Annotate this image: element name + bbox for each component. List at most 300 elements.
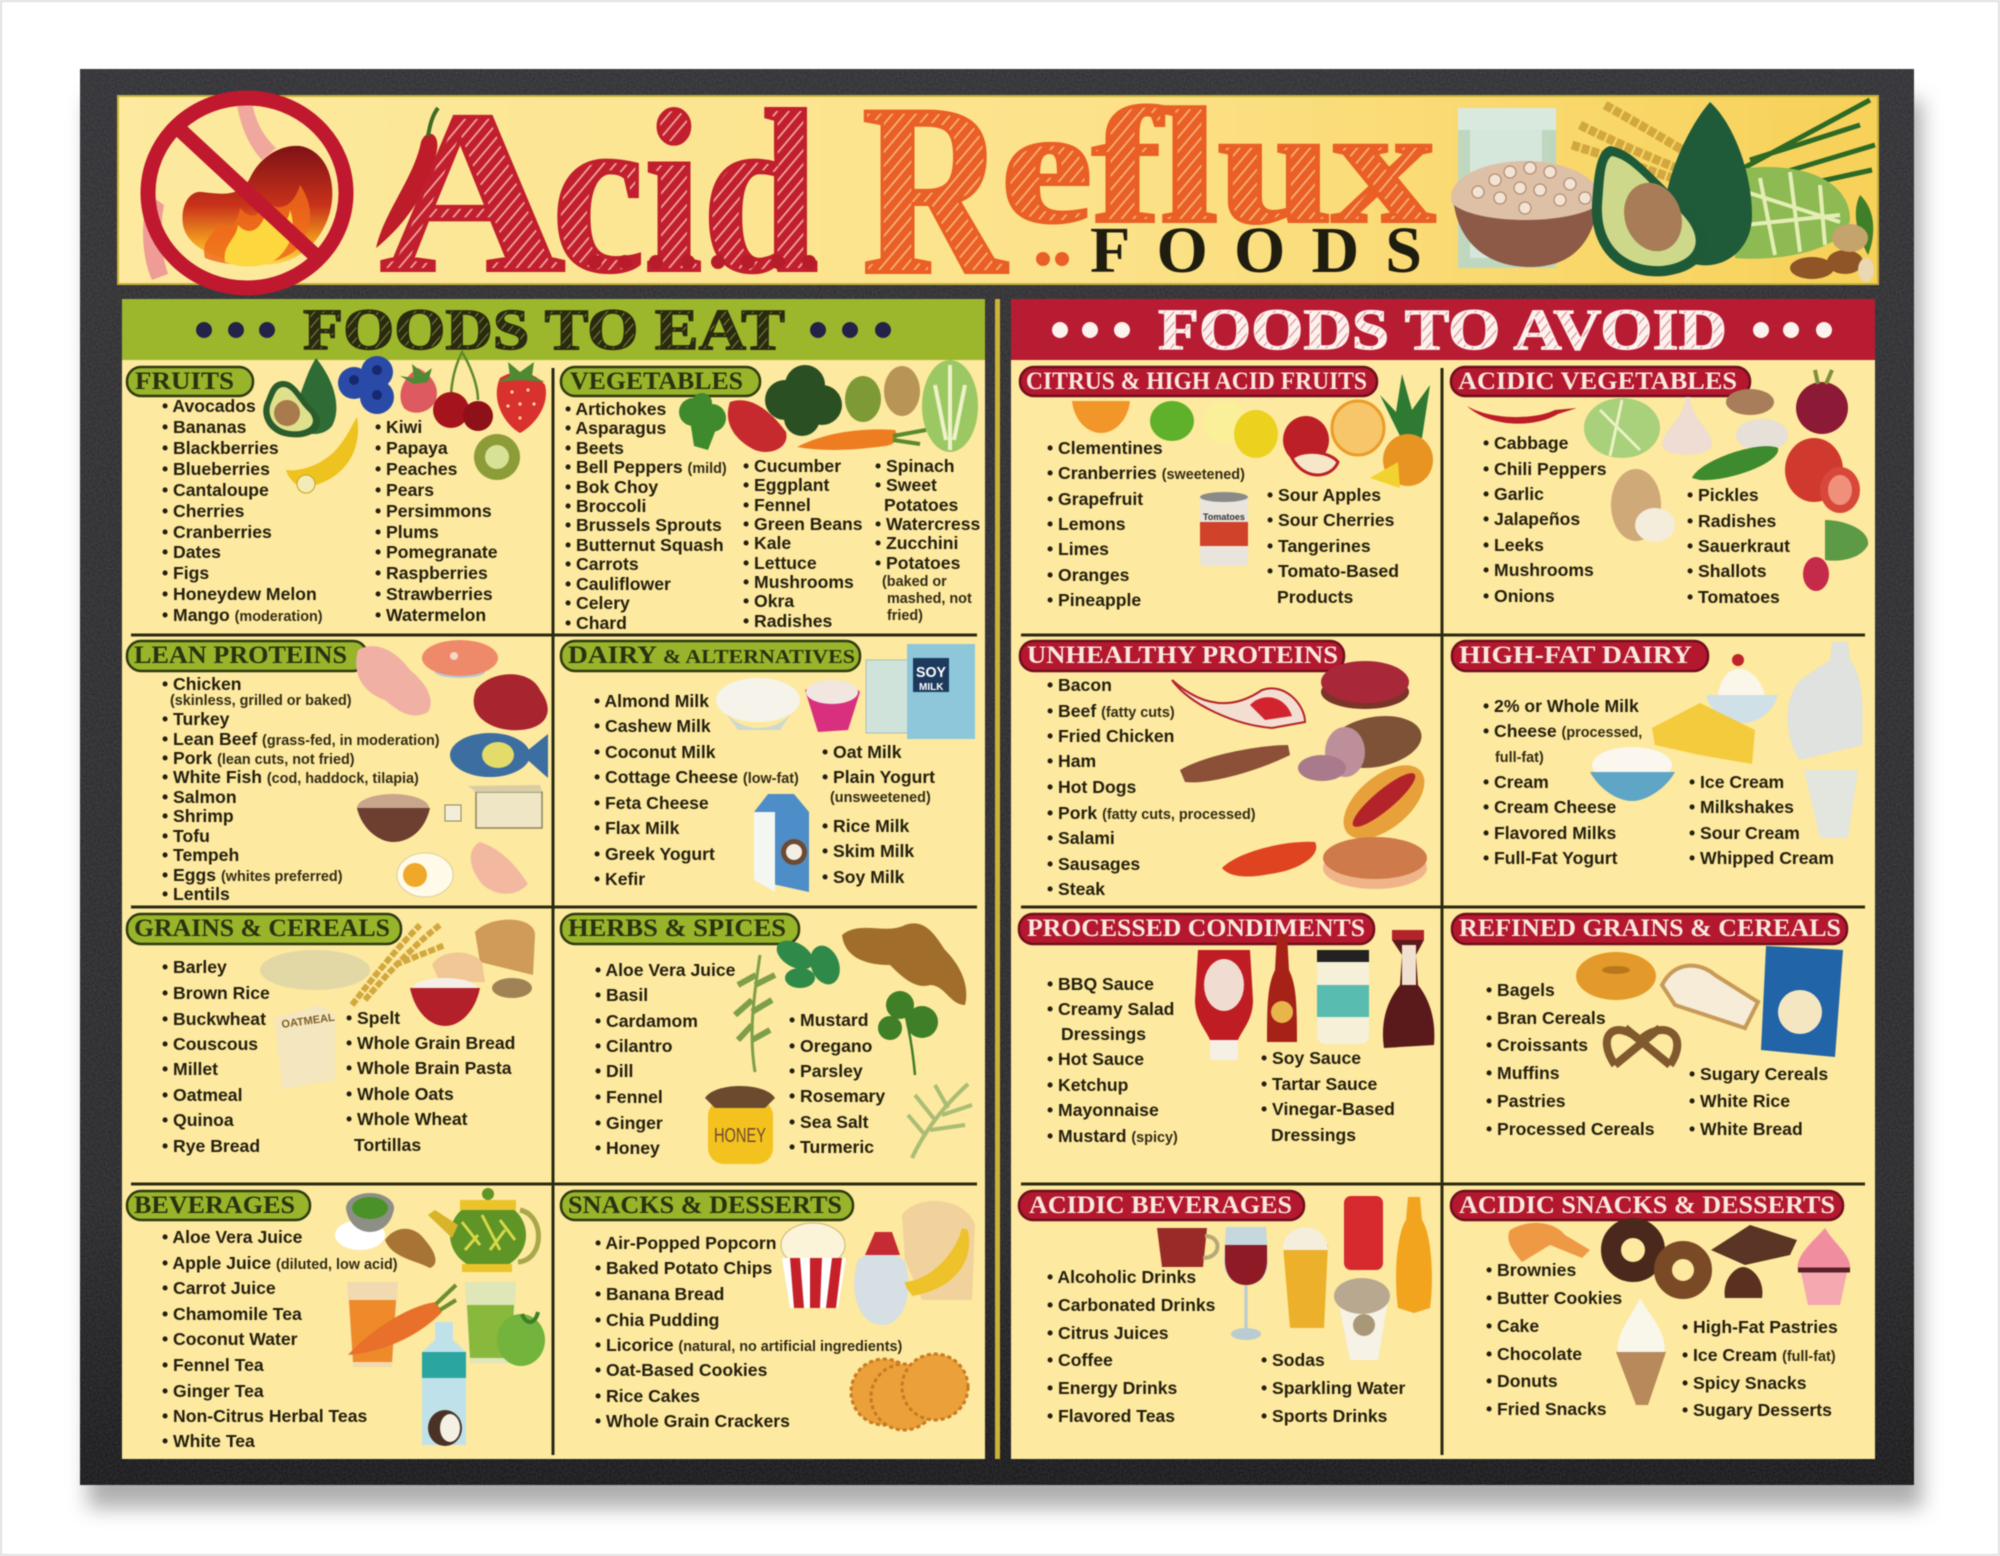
list: acidic vegetables column 1: • Jalapeños (1483, 509, 1580, 529)
list: lean proteins: • Turkey (162, 709, 230, 729)
icon: lemon slice (1203, 401, 1247, 443)
list: vegetables column 2: • Green Beans (743, 514, 863, 534)
list: acidic beverages column 1: • Energy Drinks (1047, 1378, 1178, 1398)
list: acidic beverages column 1: • Citrus Juices (1047, 1323, 1169, 1343)
icon: carrot juice glass (347, 1282, 398, 1367)
list: high-fat dairy column 1: • Full-Fat Yogurt (1483, 848, 1618, 868)
list: fruits column 1: • Figs (162, 563, 209, 583)
list: acidic beverages column 1: • Alcoholic Drinks (1047, 1267, 1196, 1287)
list: vegetables column 1: • Asparagus (565, 418, 667, 438)
list: grains column 1: • Buckwheat (162, 1009, 266, 1029)
icon: soy milk carton: MILK (919, 682, 944, 693)
list: citrus column 1: • Grapefruit (1047, 489, 1143, 509)
icon: onion (1611, 469, 1675, 542)
list: vegetables column 3: • Watercress (875, 514, 980, 534)
list: condiments column 2: • Tartar Sauce (1261, 1074, 1378, 1094)
label: lean proteins: LEAN PROTEINS (134, 642, 347, 669)
icon: steak (1321, 661, 1409, 709)
list: unhealthy proteins: • Beef (fatty cuts) (1047, 701, 1175, 721)
list: unhealthy proteins: • Sausages (1047, 854, 1140, 874)
list: high-fat dairy column 1: full-fat) (1495, 750, 1544, 766)
icon: tomato can (1200, 492, 1248, 566)
list: grains column 2: • Whole Grain Bread (346, 1033, 515, 1053)
list: beverages: • Fennel Tea (162, 1355, 264, 1375)
list: dairy column 2: • Rice Milk (822, 816, 910, 836)
list: refined column 1: • Pastries (1486, 1091, 1566, 1111)
list: grains column 1: • Oatmeal (162, 1085, 242, 1105)
title word: Acid: A (380, 64, 565, 321)
icon: napa cabbage (922, 360, 978, 452)
icon: ham (1298, 709, 1426, 781)
list: refined column 2: • White Rice (1689, 1091, 1790, 1111)
list: herbs column 1: • Honey (595, 1138, 660, 1158)
icon: blueberries (338, 356, 394, 414)
list: dairy column 2: • Skim Milk (822, 841, 914, 861)
list: grains column 2: • Whole Oats (346, 1084, 454, 1104)
list: refined column 1: • Processed Cereals (1486, 1119, 1655, 1139)
icon: egg (397, 853, 453, 897)
list: lean proteins: • Shrimp (162, 806, 234, 826)
list: fruits column 2: • Strawberries (375, 584, 493, 604)
section: lean proteins (127, 640, 548, 904)
icon: salami (1180, 745, 1290, 782)
list: dairy column 1: • Kefir (594, 869, 645, 889)
list: vegetables column 1: • Celery (565, 593, 630, 613)
list: grains column 1: • Rye Bread (162, 1136, 260, 1156)
list: vegetables column 2: • Okra (743, 591, 794, 611)
icon: fried chicken (1508, 1223, 1590, 1262)
list: beverages: • White Tea (162, 1431, 255, 1451)
icon: sausage (1222, 842, 1316, 876)
list: vegetables column 2: • Mushrooms (743, 572, 854, 592)
list: grains column 1: • Quinoa (162, 1110, 234, 1130)
list: unhealthy proteins: • Ham (1047, 751, 1096, 771)
list: citrus column 1: • Oranges (1047, 565, 1130, 585)
list: citrus column 1: • Cranberries (sweetened) (1047, 463, 1245, 483)
list: vegetables column 3: Potatoes (884, 495, 959, 515)
list: fruits column 1: • Blackberries (162, 438, 279, 458)
title word: Reflux: eflux (1001, 76, 1435, 257)
list: dairy column 2: (unsweetened) (830, 790, 931, 806)
icon: rice bowl (410, 978, 480, 1026)
icon: brussels sprout (845, 376, 881, 422)
list: acidic vegetables column 1: • Onions (1483, 586, 1555, 606)
icon: wheat stalks (352, 925, 445, 1005)
icon: hot dog (1331, 751, 1437, 853)
list: herbs column 1: • Fennel (595, 1087, 663, 1107)
icon: dark leafy broccoli (765, 365, 842, 436)
section: grains and cereals (127, 914, 535, 1156)
list: lean proteins: • Salmon (162, 787, 237, 807)
icon: thyme sprig (735, 955, 775, 1072)
icon: soy milk carton (907, 644, 975, 739)
label: acidic snacks: ACIDIC SNACKS & DESSERTS (1459, 1192, 1835, 1219)
list: fruits column 2: • Watermelon (375, 605, 486, 625)
list: acidic vegetables column 2: • Sauerkraut (1687, 536, 1790, 556)
list: unhealthy proteins: • Salami (1047, 828, 1115, 848)
list: fruits column 2: • Raspberries (375, 563, 488, 583)
list: acidic vegetables column 1: • Cabbage (1483, 433, 1569, 453)
list: dairy column 1: • Feta Cheese (594, 793, 709, 813)
list: unhealthy proteins: • Pork (fatty cuts, processed) (1047, 803, 1256, 823)
icon: honey jar: HONEY (714, 1125, 766, 1147)
heading banner: foods to eat: FOODS TO EAT (303, 297, 785, 362)
list: fruits column 2: • Plums (375, 522, 439, 542)
list: acidic beverages column 1: • Flavored Teas (1047, 1406, 1175, 1426)
list: grains column 1: • Brown Rice (162, 983, 270, 1003)
list: citrus column 2: • Tangerines (1267, 536, 1371, 556)
list: lean proteins: • Eggs (whites preferred) (162, 865, 343, 885)
section: acidic beverages (1019, 1191, 1432, 1426)
list: fruits column 1: • Dates (162, 542, 221, 562)
icon: yogurt cup (805, 680, 860, 732)
icon: broccoli (679, 393, 726, 450)
list: vegetables column 1: • Broccoli (565, 496, 646, 516)
list: acidic snacks column 1: • Brownies (1486, 1260, 1576, 1280)
icon: no-heartburn stomach (143, 98, 346, 288)
list: unhealthy proteins: • Steak (1047, 879, 1105, 899)
icon: shrimp (471, 842, 528, 894)
list: herbs column 2: • Oregano (789, 1036, 873, 1056)
list: lean proteins: • Tofu (162, 826, 210, 846)
icon: dill (908, 1084, 972, 1158)
dots before FOODS (1036, 252, 1069, 266)
icon: raspberry (400, 364, 437, 413)
icon: carrot (797, 429, 926, 450)
icon: popcorn (781, 1223, 846, 1308)
list: vegetables column 2: • Fennel (743, 495, 811, 515)
icon: strawberry (497, 362, 546, 433)
section: citrus and high acid fruits (1020, 367, 1433, 610)
list: vegetables column 1: • Bell Peppers (mild) (565, 457, 727, 477)
list: herbs column 2: • Mustard (789, 1010, 868, 1030)
icon: nuts (1790, 224, 1874, 282)
list: herbs column 1: • Cilantro (595, 1036, 673, 1056)
list: snacks: • Whole Grain Crackers (595, 1411, 790, 1431)
label: fruits: FRUITS (135, 368, 234, 395)
icon: ginger (385, 1229, 435, 1268)
list: acidic vegetables column 2: • Radishes (1687, 511, 1776, 531)
icon: tofu block (445, 785, 542, 828)
list: refined column 2: • White Bread (1689, 1119, 1803, 1139)
list: vegetables column 2: • Eggplant (743, 475, 829, 495)
icon: crackers (851, 1354, 968, 1430)
icon: banana bread (902, 1201, 975, 1300)
list: snacks: • Rice Cakes (595, 1386, 700, 1406)
list: grains column 2: • Whole Brain Pasta (346, 1058, 512, 1078)
icon: bagel (1576, 952, 1656, 1000)
icon: fish (450, 733, 548, 778)
label: fruits (127, 367, 253, 396)
list: beverages: • Carrot Juice (162, 1278, 276, 1298)
label: acidic beverages: ACIDIC BEVERAGES (1029, 1192, 1292, 1219)
section: snacks and desserts (561, 1191, 975, 1431)
list: herbs column 1: • Aloe Vera Juice (595, 960, 736, 980)
list: fruits column 2: • Kiwi (375, 417, 422, 437)
list: dairy column 2: • Oat Milk (822, 742, 902, 762)
list: grains column 2: • Whole Wheat (346, 1109, 468, 1129)
icon: hot sauce bottle (1267, 934, 1297, 1042)
list: vegetables column 3: mashed, not (887, 591, 972, 607)
icon: soy milk carton: SOY (916, 664, 946, 681)
title word: Acid: cid (552, 64, 818, 321)
icon: glass of milk (866, 660, 909, 733)
icon: cherries (433, 352, 493, 431)
icon: coconut (428, 1410, 462, 1446)
icon: soy sauce bottle (1383, 930, 1434, 1048)
list: condiments column 1: • Ketchup (1047, 1075, 1129, 1095)
list: snacks: • Baked Potato Chips (595, 1258, 772, 1278)
icon: burger patty (1323, 837, 1427, 889)
list: snacks: • Air-Popped Popcorn (595, 1233, 776, 1253)
heading banner: foods to avoid (1011, 297, 1875, 362)
list: condiments column 1: Dressings (1061, 1024, 1146, 1044)
icon: avocado (263, 358, 336, 437)
list: beverages: • Chamomile Tea (162, 1304, 302, 1324)
list: acidic snacks column 2: • Ice Cream (full-fat) (1682, 1345, 1836, 1365)
list: fruits column 1: • Bananas (162, 417, 247, 437)
list: dairy column 1: • Greek Yogurt (594, 844, 715, 864)
icon: orange soda bottle (1396, 1197, 1432, 1313)
icon: orange slice (1332, 401, 1384, 455)
list: acidic beverages column 2: • Sparkling Water (1261, 1378, 1405, 1398)
section: refined grains and cereals (1452, 914, 1847, 1139)
list: high-fat dairy column 1: • Flavored Milks (1483, 823, 1616, 843)
list: acidic snacks column 1: • Donuts (1486, 1371, 1558, 1391)
list: acidic snacks column 1: • Fried Snacks (1486, 1399, 1607, 1419)
list: high-fat dairy column 1: • 2% or Whole Milk (1483, 696, 1639, 716)
icon: bowl of grains (1451, 161, 1599, 267)
list: vegetables column 1: • Chard (565, 613, 627, 633)
icon: green apple (497, 1312, 545, 1366)
list: vegetables column 1: • Beets (565, 438, 624, 458)
list: fruits column 2: • Peaches (375, 459, 458, 479)
list: acidic snacks column 2: • Sugary Desserts (1682, 1400, 1832, 1420)
section: high-fat dairy (1452, 641, 1863, 868)
list: vegetables column 3: • Sweet (875, 475, 937, 495)
list: lean proteins: (skinless, grilled or baked) (170, 693, 352, 709)
icon: banana (286, 417, 358, 493)
list: fruits column 1: • Mango (moderation) (162, 605, 323, 625)
list: herbs column 1: • Dill (595, 1061, 633, 1081)
list: vegetables column 1: • Cauliflower (565, 574, 671, 594)
icon: wheat and greens (1572, 100, 1875, 259)
list: herbs column 2: • Parsley (789, 1061, 863, 1081)
list: herbs column 2: • Sea Salt (789, 1112, 869, 1132)
list: condiments column 2: Dressings (1271, 1125, 1356, 1145)
icon: seeds (492, 978, 532, 998)
list: vegetables column 1: • Brussels Sprouts (565, 515, 722, 535)
list: snacks: • Licorice (natural, no artificial ingredients) (595, 1335, 902, 1355)
list: acidic snacks column 2: • Spicy Snacks (1682, 1373, 1807, 1393)
section: beverages (127, 1188, 545, 1451)
list: high-fat dairy column 2: • Sour Cream (1689, 823, 1800, 843)
list: acidic vegetables column 1: • Garlic (1483, 484, 1544, 504)
list: citrus column 1: • Clementines (1047, 438, 1163, 458)
icon: tomato (1785, 438, 1860, 513)
icon: red apple (1283, 416, 1338, 475)
icon: cucumber (1692, 446, 1778, 480)
section: dairy and alternatives (561, 641, 975, 892)
list: citrus column 1: • Limes (1047, 539, 1109, 559)
icon: oatmeal box: OATMEAL (281, 1012, 336, 1031)
list: vegetables column 1: • Butternut Squash (565, 535, 724, 555)
icon: ginger root (842, 923, 966, 1005)
list: vegetables column 2: • Kale (743, 533, 791, 553)
list: fruits column 1: • Cranberries (162, 522, 272, 542)
list: acidic vegetables column 1: • Leeks (1483, 535, 1544, 555)
label: processed condiments: PROCESSED CONDIMENTS (1027, 915, 1365, 942)
list: grains column 2: • Spelt (346, 1008, 400, 1028)
icon: coffee mug (1157, 1228, 1218, 1267)
icon: cheese wedge (1652, 703, 1755, 764)
list: fruits column 2: • Papaya (375, 438, 448, 458)
list: acidic vegetables column 1: • Mushrooms (1483, 560, 1594, 580)
list: grains column 1: • Couscous (162, 1034, 258, 1054)
list: dairy column 1: • Flax Milk (594, 818, 680, 838)
list: dairy column 1: • Almond Milk (594, 691, 709, 711)
list: refined column 1: • Croissants (1486, 1035, 1588, 1055)
list: grains column 1: • Barley (162, 957, 227, 977)
panel: foods to avoid (1011, 297, 1875, 1459)
list: vegetables column 2: • Lettuce (743, 553, 817, 573)
icon: tomato can: Tomatoes (1203, 512, 1245, 522)
list: acidic snacks column 1: • Chocolate (1486, 1344, 1582, 1364)
list: citrus column 2: Products (1277, 587, 1353, 607)
icon: soda can (1344, 1196, 1383, 1270)
icon: red chili (1467, 406, 1577, 424)
icon: yogurt bowl (1590, 747, 1675, 801)
icon: red meat (474, 674, 548, 730)
list: citrus column 2: • Sour Apples (1267, 485, 1381, 505)
icon: ketchup bottle (1195, 950, 1253, 1060)
list: refined column 2: • Sugary Cereals (1689, 1064, 1828, 1084)
list: condiments column 1: • BBQ Sauce (1047, 974, 1154, 994)
list: citrus column 1: • Lemons (1047, 514, 1126, 534)
list: citrus column 1: • Pineapple (1047, 590, 1141, 610)
list: fruits column 1: • Avocados (162, 396, 256, 416)
list: vegetables column 2: • Radishes (743, 611, 832, 631)
list: acidic snacks column 2: • High-Fat Pastries (1682, 1317, 1838, 1337)
list: vegetables column 3: • Potatoes (875, 553, 961, 573)
icon: lentil bowl (357, 794, 430, 842)
icon: glass of milk (1458, 108, 1556, 268)
icon: pineapple (1370, 374, 1433, 488)
icon: avocado (1592, 102, 1752, 276)
list: vegetables column 1: • Carrots (565, 554, 639, 574)
section: vegetables (561, 360, 980, 633)
list: herbs column 1: • Basil (595, 985, 648, 1005)
icon: ice cream cone (1616, 1298, 1666, 1405)
list: vegetables column 3: (baked or (882, 574, 947, 590)
list: condiments column 1: • Mayonnaise (1047, 1100, 1159, 1120)
icon: truffle (1725, 1267, 1762, 1298)
icon: red pepper (728, 400, 787, 452)
list: lean proteins: • White Fish (cod, haddock, tilapia) (162, 767, 419, 787)
list: beverages: • Apple Juice (diluted, low acid) (162, 1253, 398, 1273)
list: dairy column 2: • Plain Yogurt (822, 767, 935, 787)
icon: garlic (1662, 397, 1712, 455)
icon: milk jug (1788, 642, 1863, 760)
list: vegetables column 2: • Cucumber (743, 456, 841, 476)
list: condiments column 1: • Creamy Salad (1047, 999, 1174, 1019)
list: beverages: • Ginger Tea (162, 1381, 264, 1401)
label: acidic vegetables: ACIDIC VEGETABLES (1458, 368, 1737, 395)
list: condiments column 1: • Hot Sauce (1047, 1049, 1144, 1069)
heading banner: foods to eat (122, 297, 985, 362)
list: unhealthy proteins: • Fried Chicken (1047, 726, 1174, 746)
dots after Acid (588, 255, 816, 269)
icon: chili pepper (376, 108, 438, 248)
icon: coffee to-go cup (1334, 1278, 1390, 1360)
label: herbs and spices: HERBS & SPICES (568, 915, 786, 942)
list: acidic snacks column 1: • Butter Cookies (1486, 1288, 1622, 1308)
icon: carrot (348, 1285, 456, 1355)
icon: salmon steak (422, 640, 498, 678)
icon: lemon (1234, 410, 1278, 458)
icon: honey jar (705, 1086, 775, 1164)
icon: oat flakes (260, 950, 370, 990)
label: dairy and alternatives: DAIRY & ALTERNATIVES (568, 642, 855, 669)
list: beverages: • Non-Citrus Herbal Teas (162, 1406, 367, 1426)
list: condiments column 1: • Mustard (spicy) (1047, 1126, 1178, 1146)
list: lean proteins: • Pork (lean cuts, not fried) (162, 748, 355, 768)
icon: orange half (1072, 401, 1130, 433)
list: herbs column 2: • Rosemary (789, 1086, 885, 1106)
list: lean proteins: • Lentils (162, 884, 230, 904)
label: citrus: CITRUS & HIGH ACID FRUITS (1026, 368, 1367, 395)
icon: beet (1796, 370, 1848, 434)
list: fruits column 2: • Pomegranate (375, 542, 498, 562)
section: unhealthy proteins (1020, 641, 1437, 899)
list: high-fat dairy column 2: • Whipped Cream (1689, 848, 1834, 868)
section: herbs and spices (561, 914, 972, 1164)
list: fruits column 2: • Persimmons (375, 501, 492, 521)
list: refined column 1: • Muffins (1486, 1063, 1560, 1083)
label: snacks and desserts: SNACKS & DESSERTS (568, 1192, 842, 1219)
list: grains column 2: Tortillas (354, 1135, 421, 1155)
list: acidic snacks column 1: • Cake (1486, 1316, 1539, 1336)
list: high-fat dairy column 2: • Ice Cream (1689, 772, 1784, 792)
list: acidic vegetables column 2: • Tomatoes (1687, 587, 1780, 607)
list: acidic beverages column 2: • Sodas (1261, 1350, 1325, 1370)
list: vegetables column 3: fried) (887, 608, 923, 624)
list: snacks: • Banana Bread (595, 1284, 724, 1304)
icon: lamb chop (1172, 680, 1305, 728)
list: unhealthy proteins: • Bacon (1047, 675, 1112, 695)
list: acidic beverages column 2: • Sports Drinks (1261, 1406, 1388, 1426)
title word: Reflux: R (862, 54, 1008, 325)
list: beverages: • Coconut Water (162, 1329, 298, 1349)
icon: chocolate donut (1611, 1228, 1703, 1290)
icon: chocolate bar (1711, 1225, 1797, 1265)
icon: cottage cheese bowl (716, 678, 800, 730)
list: dairy column 1: • Coconut Milk (594, 742, 716, 762)
label: unhealthy proteins: UNHEALTHY PROTEINS (1027, 642, 1338, 669)
list: vegetables column 1: • Bok Choy (565, 477, 658, 497)
list: herbs column 1: • Ginger (595, 1113, 663, 1133)
list: fruits column 1: • Honeydew Melon (162, 584, 317, 604)
section: processed condiments (1019, 914, 1434, 1146)
list: unhealthy proteins: • Hot Dogs (1047, 777, 1136, 797)
icon: mushrooms (1726, 389, 1788, 451)
section: acidic snacks and desserts (1451, 1191, 1850, 1420)
icon: green tea cup (335, 1193, 394, 1250)
list: snacks: • Oat-Based Cookies (595, 1360, 768, 1380)
icon: whipped cream bowl (1706, 654, 1778, 723)
list: vegetables column 1: • Artichokes (565, 399, 667, 419)
icon: parsley (878, 991, 938, 1075)
